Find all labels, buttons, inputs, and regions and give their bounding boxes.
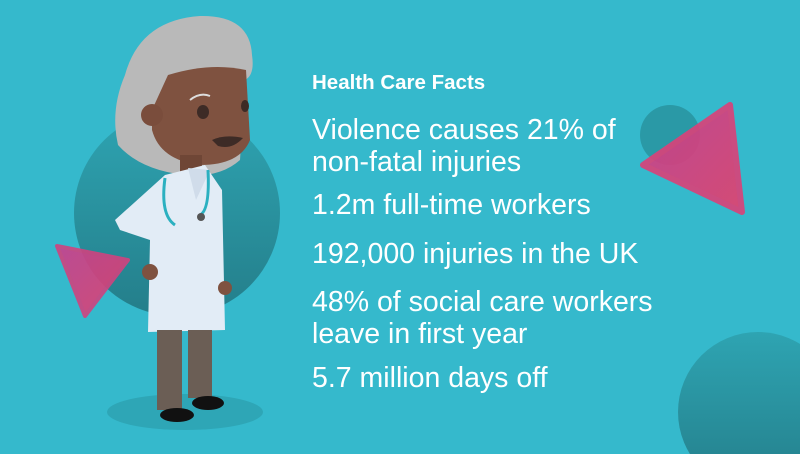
fact: workers: 1.2m full-time workers xyxy=(312,189,591,221)
left pink triangle xyxy=(57,246,128,316)
fact: social care: 48% of social care workers xyxy=(312,286,653,318)
hands xyxy=(142,264,158,280)
right pink triangle xyxy=(643,105,742,212)
right teal circle xyxy=(640,105,700,165)
bottom right circle xyxy=(678,332,800,454)
neck xyxy=(180,155,202,177)
fact: violence: Violence causes 21% of xyxy=(312,114,616,146)
shoes xyxy=(160,408,194,422)
fact: social care: leave in first year xyxy=(312,318,527,350)
fact: injuries: 192,000 injuries in the UK xyxy=(312,238,638,270)
pants xyxy=(157,330,182,410)
face xyxy=(152,67,250,165)
fact: violence xyxy=(312,114,616,178)
stethoscope xyxy=(164,170,208,225)
fact: social care xyxy=(312,286,653,350)
fact: violence: non-fatal injuries xyxy=(312,146,521,178)
shadow xyxy=(107,394,263,430)
circle behind doctor xyxy=(74,110,280,316)
title: Health Care Facts xyxy=(312,71,485,94)
fact: days off: 5.7 million days off xyxy=(312,362,548,394)
doctor xyxy=(115,16,253,422)
eyes xyxy=(197,105,209,119)
hair xyxy=(115,16,253,175)
coat xyxy=(115,165,225,332)
